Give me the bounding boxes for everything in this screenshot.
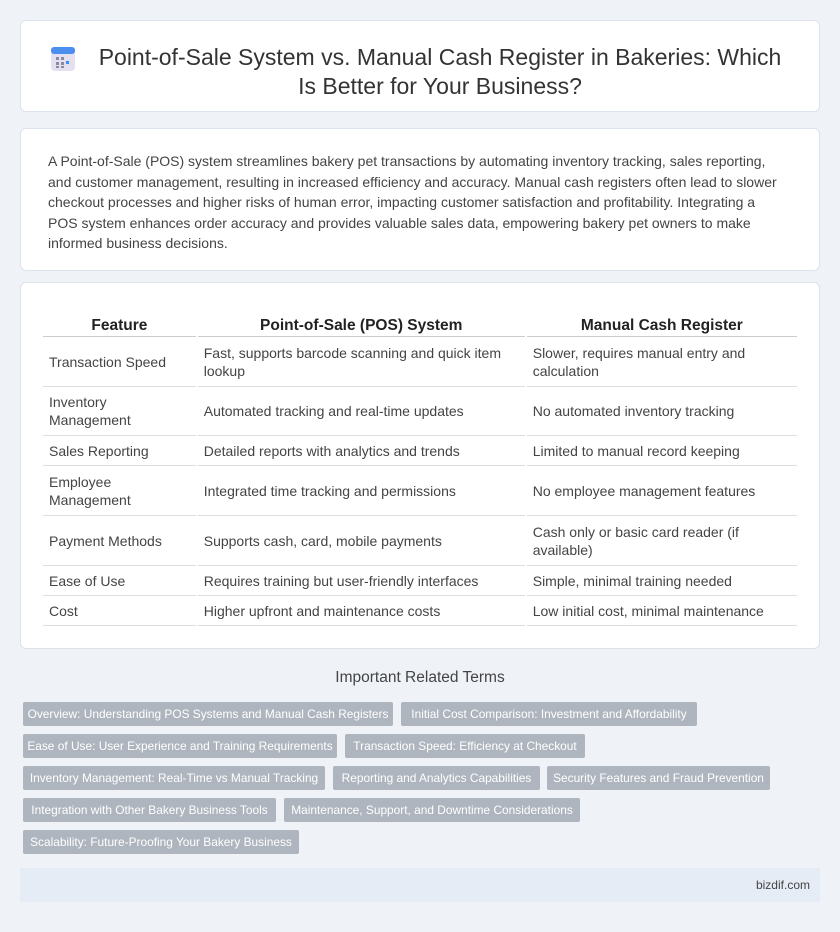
related terms tags: Initial Cost Comparison: Investment and Affordability [411, 707, 687, 721]
footer: bizdif.com [756, 878, 810, 892]
comparison table card: Higher upfront and maintenance costs [204, 602, 440, 618]
footer [20, 868, 820, 902]
comparison table card: Employee Management [49, 474, 131, 508]
comparison table card: Automated tracking and real-time updates [204, 403, 464, 419]
related terms tags: Reporting and Analytics Capabilities [342, 771, 531, 785]
related terms tags: Transaction Speed: Efficiency at Checkout [353, 739, 577, 753]
title: Point-of-Sale System vs. Manual Cash Register in Bakeries: Which Is Better for Your Business? [99, 44, 781, 99]
related terms tags: Security Features and Fraud Prevention [553, 771, 764, 785]
related terms tags: Inventory Management: Real-Time vs Manual Tracking [30, 771, 318, 785]
comparison table card: Cost [49, 602, 78, 618]
comparison table card: Ease of Use [49, 572, 125, 588]
comparison table card: Manual Cash Register [581, 316, 743, 334]
related terms tags: Scalability: Future-Proofing Your Bakery Business [30, 835, 292, 849]
comparison table card: Cash only or basic card reader (if available) [533, 524, 739, 558]
icon: calendar [51, 47, 75, 71]
comparison table card: Feature [91, 316, 147, 334]
related terms tags: Maintenance, Support, and Downtime Considerations [291, 803, 573, 817]
related terms tags: Overview: Understanding POS Systems and Manual Cash Registers [28, 707, 388, 721]
intro text card: A Point-of-Sale (POS) system streamlines bakery pet transactions by automating inventory tracking, sales reporting, and customer management, resulting in increased efficiency and accuracy. Manual cash registers often lead to slower checkout processes and higher risks of human error, impacting customer satisfaction and profitability. Integrating a POS system enhances order accuracy and provides valuable sales data, empowering bakery pet owners to make informed business decisions. [48, 153, 777, 251]
comparison table card: Simple, minimal training needed [533, 572, 732, 588]
comparison table card: Inventory Management [49, 394, 131, 428]
comparison table card: No employee management features [533, 482, 755, 498]
comparison table card: Slower, requires manual entry and calculation [533, 344, 745, 378]
related terms tags: Integration with Other Bakery Business Tools [31, 803, 268, 817]
comparison table card: Low initial cost, minimal maintenance [533, 602, 764, 618]
comparison table card: Limited to manual record keeping [533, 442, 740, 458]
comparison table card: No automated inventory tracking [533, 403, 734, 419]
comparison table card: Requires training but user-friendly interfaces [204, 572, 478, 588]
comparison table card: Supports cash, card, mobile payments [204, 532, 442, 548]
intro text card [20, 128, 820, 271]
comparison table card: Sales Reporting [49, 442, 149, 458]
header card [20, 20, 820, 112]
comparison table card: Transaction Speed [49, 354, 166, 370]
related terms tags: Ease of Use: User Experience and Training Requirements [27, 739, 333, 753]
comparison table card: Integrated time tracking and permissions [204, 482, 456, 498]
comparison table card: Detailed reports with analytics and trends [204, 442, 460, 458]
comparison table card: Point-of-Sale (POS) System [260, 316, 462, 334]
comparison table card: Payment Methods [49, 532, 162, 548]
comparison table card: Fast, supports barcode scanning and quick item lookup [204, 344, 501, 378]
comparison table card [20, 282, 820, 649]
related terms heading: Important Related Terms [335, 669, 505, 686]
